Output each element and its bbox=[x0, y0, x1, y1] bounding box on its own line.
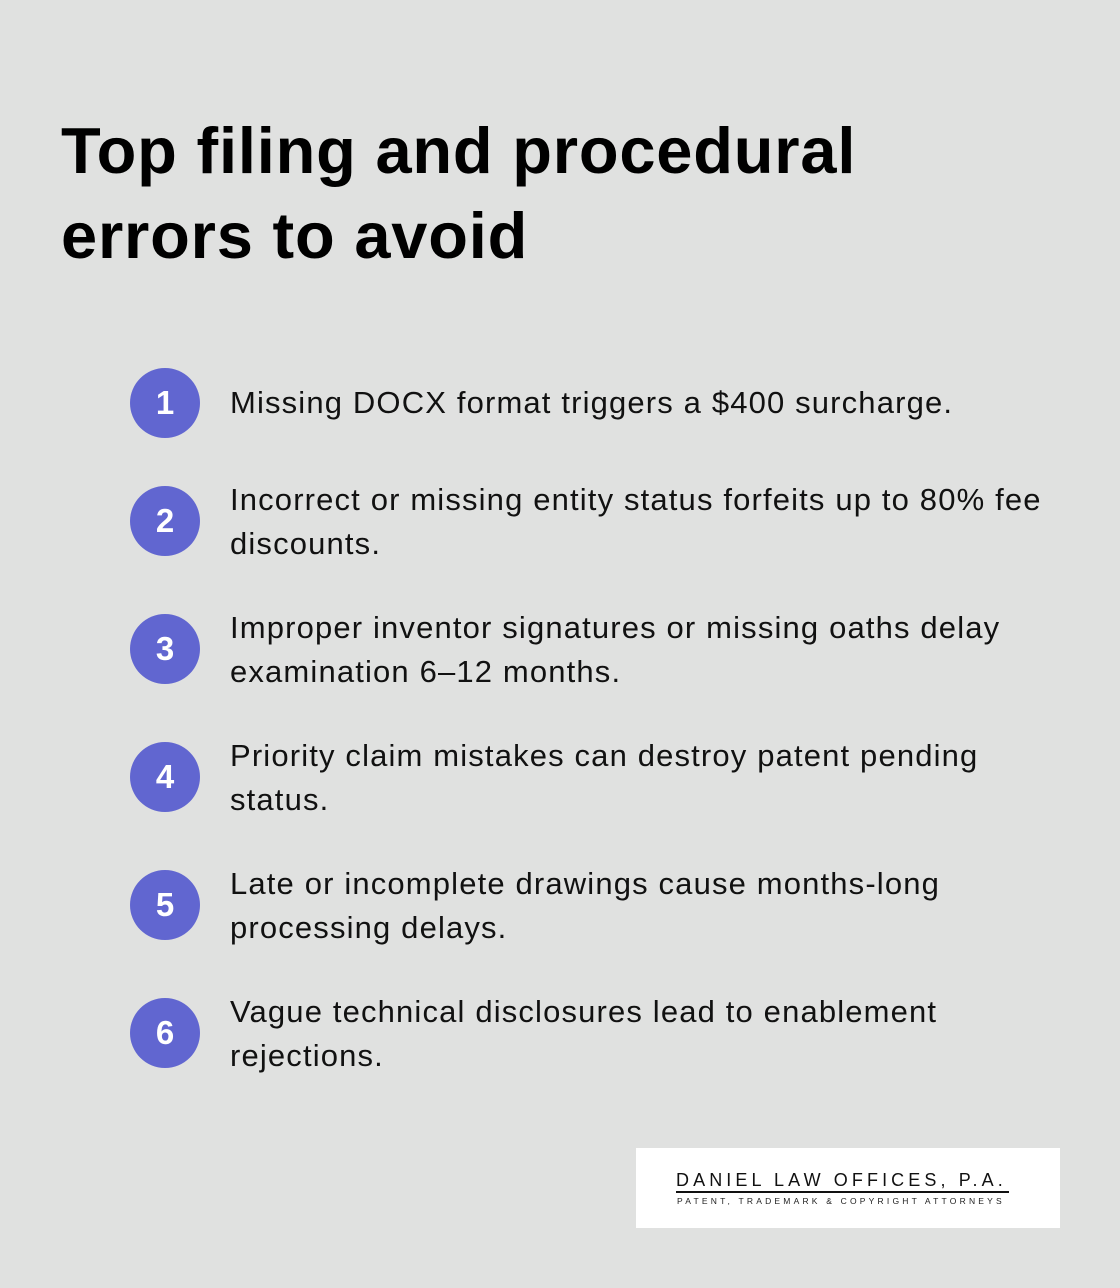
item 6: rejections. bbox=[230, 1038, 384, 1073]
logo bbox=[636, 1148, 1060, 1228]
item 1: 1 bbox=[156, 384, 174, 421]
title: errors to avoid bbox=[61, 199, 528, 272]
item 3: Improper inventor signatures or missing oaths delay bbox=[230, 610, 1000, 645]
item 5: processing delays. bbox=[230, 910, 507, 945]
item 2: 2 bbox=[156, 502, 174, 539]
title: Top filing and procedural bbox=[61, 114, 856, 187]
item 5 bbox=[130, 866, 940, 945]
item 1 bbox=[130, 368, 953, 438]
item 4 bbox=[130, 738, 978, 817]
item 2 bbox=[130, 482, 1042, 561]
title bbox=[61, 114, 856, 272]
item 4: Priority claim mistakes can destroy patent pending bbox=[230, 738, 978, 773]
logo: PATENT, TRADEMARK & COPYRIGHT ATTORNEYS bbox=[677, 1196, 1005, 1206]
item 3: 3 bbox=[156, 630, 174, 667]
item 5: 5 bbox=[156, 886, 174, 923]
logo: DANIEL LAW OFFICES, P.A. bbox=[676, 1170, 1007, 1190]
item 4: 4 bbox=[156, 758, 174, 795]
item 5: Late or incomplete drawings cause months-long bbox=[230, 866, 940, 901]
item 3: examination 6–12 months. bbox=[230, 654, 621, 689]
item 6: 6 bbox=[156, 1014, 174, 1051]
item 3 bbox=[130, 610, 1000, 689]
item 2: Incorrect or missing entity status forfeits up to 80% fee bbox=[230, 482, 1042, 517]
item 6: Vague technical disclosures lead to enablement bbox=[230, 994, 937, 1029]
item 1: Missing DOCX format triggers a $400 surcharge. bbox=[230, 385, 953, 420]
item 2: discounts. bbox=[230, 526, 381, 561]
item 4: status. bbox=[230, 782, 329, 817]
item 6 bbox=[130, 994, 937, 1073]
